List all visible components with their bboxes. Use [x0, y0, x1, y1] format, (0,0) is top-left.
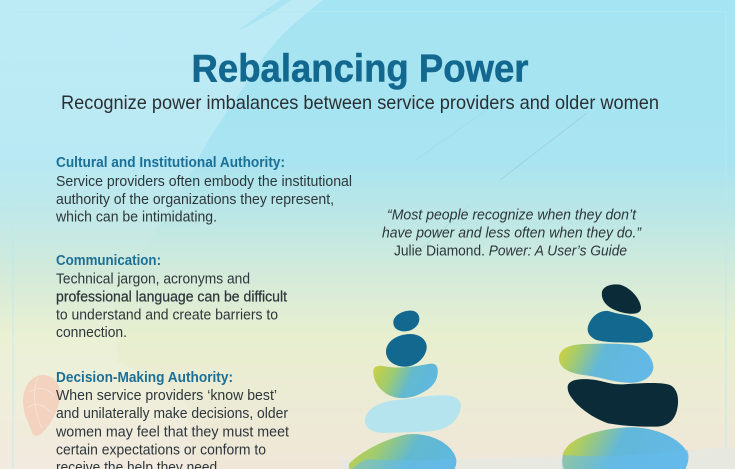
text block: decision-making authority: certain expectations or conform to [56, 442, 266, 458]
text block: communication [56, 253, 287, 341]
stone 5 [563, 427, 688, 469]
text block: cultural and institutional authority: which can be intimidating. [55, 210, 217, 226]
subtitle: Recognize power imbalances between service providers and older women [61, 92, 659, 114]
heading: decision-making authority: Decision-Making Authority: [56, 370, 233, 386]
text block: cultural and institutional authority: Service providers often embody the institutional [56, 174, 352, 190]
stone 3 [373, 364, 438, 398]
stone 2 [386, 334, 427, 367]
quote [382, 208, 642, 260]
heading: communication: Communication: [56, 253, 161, 269]
lighter upper-left background shape [0, 0, 323, 270]
left stone stack [349, 311, 461, 469]
stone 4 [568, 379, 678, 427]
quote: have power and less often when they do.” [382, 226, 642, 242]
quote: “Most people recognize when they don’t [387, 208, 637, 224]
heading: cultural and institutional authority: Cultural and Institutional Authority: [56, 155, 285, 171]
text block: decision-making authority: women may feel that they must meet [55, 424, 289, 440]
bottom pale band [340, 447, 735, 469]
stone 5 [349, 434, 456, 469]
icon: faint shell [23, 375, 60, 436]
text block: decision-making authority [55, 370, 289, 469]
stone 3 [559, 344, 653, 383]
translucent blue overlay at stone base [352, 450, 688, 469]
text block: communication: Technical jargon, acronyms and [56, 272, 250, 288]
text block: communication: professional language can be difficult [56, 290, 287, 306]
stone 4 [365, 395, 461, 433]
text block: communication: to understand and create barriers to [56, 308, 278, 324]
title: Rebalancing Power [192, 48, 528, 90]
text block: communication: connection. [56, 325, 127, 341]
text block: decision-making authority: and unilaterally make decisions, older [56, 406, 288, 422]
stone 2 [588, 311, 653, 343]
paler lower-left wash [0, 290, 190, 469]
stone 1 [393, 311, 419, 331]
scratch lines [500, 113, 587, 180]
stone 1 [602, 284, 641, 314]
right stone stack [559, 284, 688, 469]
pale accent sliver [238, 0, 292, 31]
text block: cultural and institutional authority [55, 155, 352, 226]
text block: cultural and institutional authority: authority of the organizations they represent, [56, 192, 334, 208]
text block: decision-making authority: When service providers ‘know best’ [56, 388, 277, 404]
quote attribution: Julie Diamond. Power: A User’s Guide [394, 244, 627, 260]
